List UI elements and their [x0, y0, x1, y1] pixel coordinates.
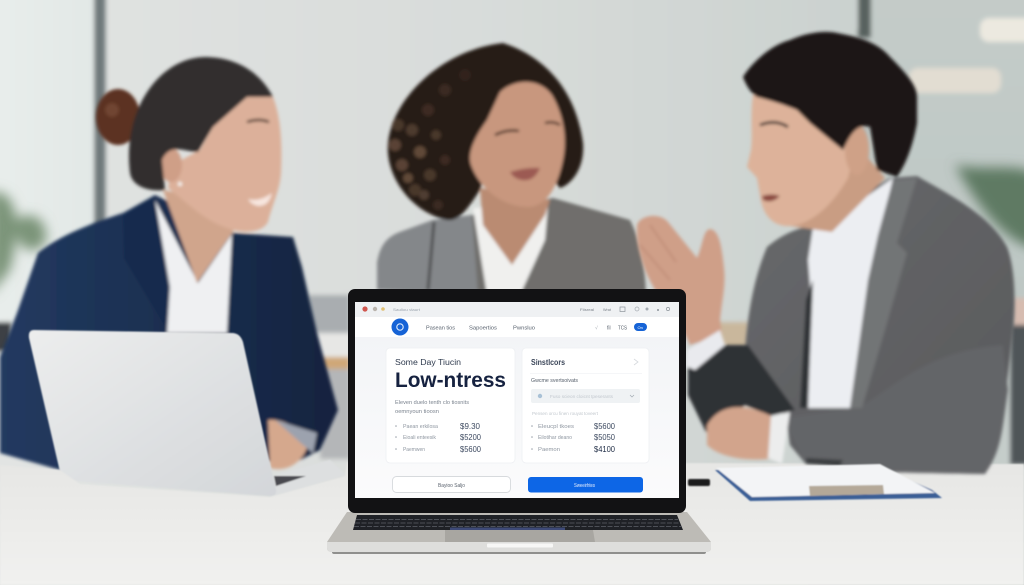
pricing card: left: $5200 — [460, 433, 482, 442]
shirt shadow — [800, 280, 813, 408]
site navigation: fil — [607, 326, 611, 332]
white shirt — [807, 178, 893, 408]
neck — [790, 158, 885, 232]
laptop screen — [355, 302, 679, 498]
raised hand — [637, 216, 725, 345]
browser toolbar: Sauliou vlaurt — [393, 307, 421, 312]
person: woman in navy blazer — [0, 57, 338, 470]
lapel — [850, 178, 917, 408]
jacket buttons — [806, 458, 843, 466]
blue board — [715, 467, 942, 501]
paper — [716, 464, 935, 497]
person: woman with curly hair — [377, 43, 646, 295]
blazer — [377, 198, 646, 295]
hair — [743, 32, 917, 177]
plant left — [0, 192, 46, 295]
pricing card: left: $5600 — [460, 445, 482, 454]
site navigation: TCS — [618, 326, 628, 332]
hand on keyboard — [268, 420, 307, 469]
pricing card: left — [386, 348, 515, 463]
fist — [707, 407, 775, 459]
site navigation: √ — [595, 324, 598, 332]
pricing card: right — [522, 348, 649, 463]
suit jacket — [745, 176, 1015, 474]
pricing card: right: $4100 — [594, 445, 616, 454]
pricing card: right: Eilotihar deano — [538, 435, 572, 441]
person: man in grey suit — [637, 32, 1015, 474]
pricing card: left: Eioali enteesik — [403, 435, 437, 441]
face — [470, 82, 565, 207]
dark sleeve — [688, 345, 795, 432]
primary button: Sweeirhtes — [574, 483, 595, 489]
browser toolbar: Wrat — [603, 307, 612, 312]
bun — [96, 89, 140, 145]
shirt — [473, 205, 548, 295]
navy blazer — [0, 195, 338, 470]
neck — [480, 188, 550, 265]
browser toolbar: Fiisreal — [580, 307, 594, 312]
pricing card: left: $9.30 — [460, 422, 481, 431]
pricing card: left: Some Day Tiucin — [395, 358, 461, 367]
outline button — [392, 476, 510, 492]
site navigation: Sapoertios — [469, 326, 497, 332]
pricing card: left: oemnyoun tioosn — [395, 409, 439, 415]
pricing card: right: $5600 — [594, 422, 616, 431]
metal clip — [809, 485, 884, 496]
pricing card: right: Paemon — [538, 447, 560, 453]
tied hair — [129, 57, 273, 190]
laptop base — [272, 460, 346, 496]
laptop lid — [29, 330, 276, 496]
site navigation: Pwnsluo — [513, 326, 535, 332]
primary button — [528, 477, 643, 492]
pricing card: left: Paemwen — [403, 447, 425, 453]
site navigation: Pasean tios — [426, 326, 455, 332]
phone on table — [688, 479, 710, 486]
site navigation — [355, 317, 679, 337]
laptop base — [327, 512, 711, 554]
clipboard with papers — [715, 464, 942, 501]
face — [747, 90, 860, 226]
laptop: silver back view — [29, 330, 346, 496]
pricing card: right: Gwcme svertsoivats — [531, 378, 579, 384]
shirt cuff — [686, 330, 725, 370]
laptop lid and bezel — [348, 289, 686, 513]
browser toolbar — [355, 302, 679, 317]
plant right — [955, 165, 1024, 250]
pricing card: right: $5050 — [594, 433, 616, 442]
sleeve — [783, 345, 1008, 474]
outline button: Bayioo Saljo — [438, 483, 465, 489]
table — [0, 462, 1024, 585]
pricing card: right: Sinstlcors — [531, 358, 565, 367]
site navigation: On — [638, 325, 643, 330]
pricing card: right: Pensen orcu finen rouyat toveert — [532, 411, 599, 416]
pricing card: right: Fuso scieon cloicnt tpeserants — [550, 394, 614, 399]
white shirt — [155, 200, 232, 333]
neck — [163, 190, 240, 283]
pricing card: right: Eleucpl tkoes — [538, 424, 575, 430]
cuff — [768, 412, 790, 464]
curly hair — [388, 43, 583, 220]
pricing card: left: Paean erkilosa — [403, 424, 438, 430]
face — [168, 97, 281, 232]
foreground laptop — [327, 289, 711, 554]
pricing card: left: Eleven duelo tenth clo tiosnits — [395, 400, 470, 406]
pricing card: left: Low-ntress — [395, 369, 506, 392]
